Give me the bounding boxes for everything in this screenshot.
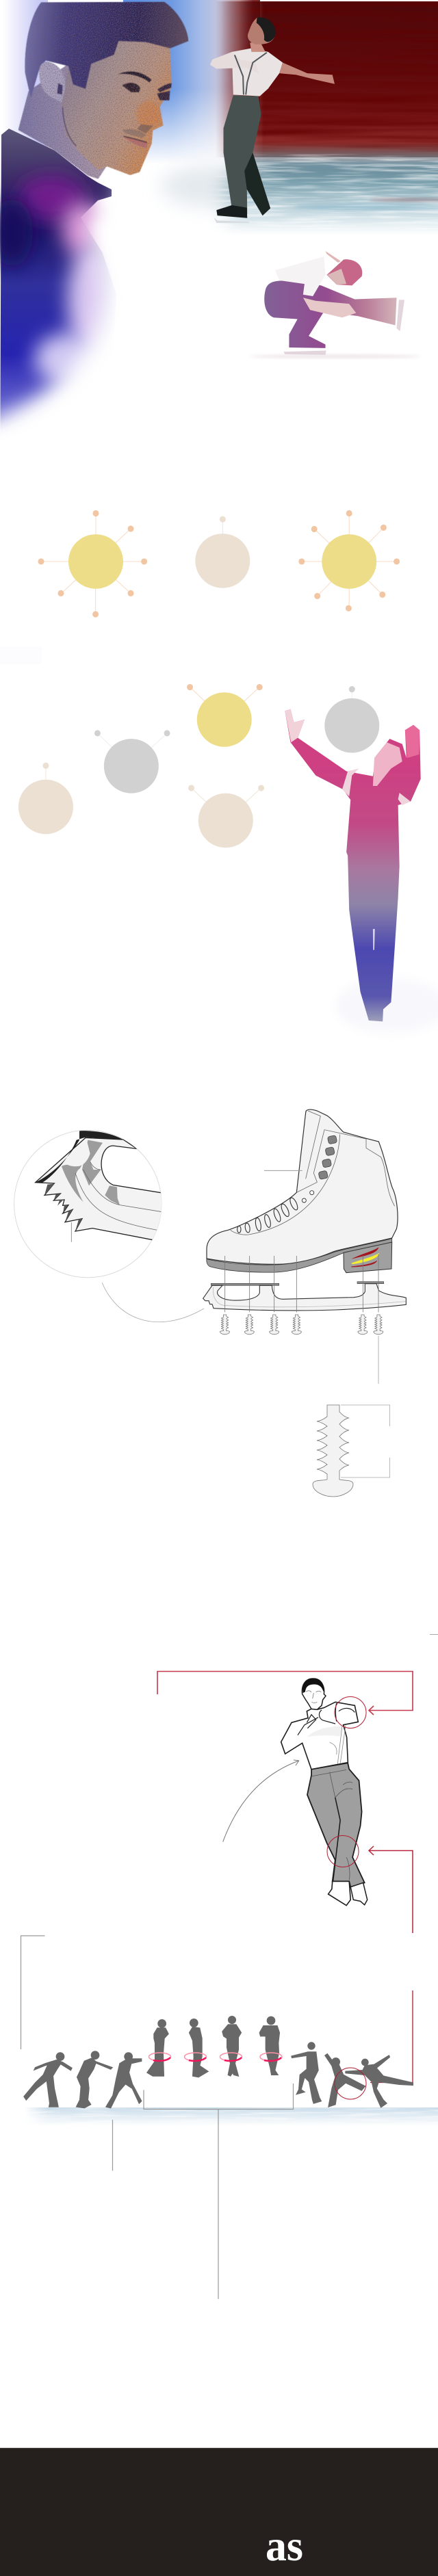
nose highlight xyxy=(136,101,160,127)
contour lines xyxy=(75,1161,162,1230)
forearm lines xyxy=(298,1703,355,1735)
sole xyxy=(207,1239,392,1272)
inner leg line xyxy=(333,1798,340,1881)
ring 3 xyxy=(220,2053,242,2061)
photo: arms-up skater xyxy=(285,709,421,1021)
other hand xyxy=(405,725,420,758)
silhouette 7 xyxy=(259,2016,279,2075)
far brow and eye xyxy=(157,83,172,101)
silhouette 3 xyxy=(106,2053,142,2108)
arrow: lens to blade tip xyxy=(102,1283,204,1322)
photo: shoulder of skater xyxy=(0,129,115,431)
small screws row xyxy=(220,1315,383,1335)
shirt xyxy=(275,257,326,296)
shirt xyxy=(232,49,283,96)
blue sky behind face xyxy=(123,0,260,178)
footer bar xyxy=(0,2448,438,2576)
panel: top circle row xyxy=(0,510,438,1034)
photo: portrait head xyxy=(18,2,188,179)
arm xyxy=(303,298,356,317)
head xyxy=(327,259,362,285)
footer top rule xyxy=(0,2447,438,2448)
illustration: skate boot xyxy=(203,1109,406,1312)
pale ice drift xyxy=(161,166,263,207)
ear xyxy=(39,62,65,103)
back skate xyxy=(350,1882,368,1905)
circle: beige pair xyxy=(188,785,264,847)
spin rings xyxy=(149,2053,282,2061)
trouser creases xyxy=(311,1770,352,1880)
face xyxy=(327,269,346,285)
lace holes xyxy=(302,1191,314,1202)
trousers xyxy=(224,95,270,215)
black top xyxy=(36,1131,123,1183)
skate boots xyxy=(216,205,247,218)
shirt shading xyxy=(307,1726,342,1737)
screw guide lines xyxy=(225,1254,378,1312)
ring 2 xyxy=(185,2053,207,2061)
jaw line xyxy=(63,107,77,146)
nose shadow xyxy=(137,124,153,133)
circle group 2: beige with one satellite xyxy=(195,516,250,588)
silhouette 2 xyxy=(77,2051,112,2108)
gray bevels xyxy=(62,1140,120,1205)
logo: as: as xyxy=(266,2521,303,2570)
red callout top xyxy=(157,1672,413,1715)
white hub xyxy=(67,1142,90,1167)
hair xyxy=(25,2,188,98)
moustache shadow xyxy=(122,129,146,138)
panel: zoom lens on blade teeth xyxy=(14,1130,166,1278)
panel: hero background xyxy=(0,0,438,239)
laces xyxy=(237,1197,299,1233)
face xyxy=(373,742,402,786)
trousers xyxy=(307,1763,365,1887)
illustration: skater torso and head xyxy=(281,1679,358,1770)
blade body xyxy=(36,1138,166,1240)
ice streaks xyxy=(215,149,438,231)
left arm xyxy=(210,52,259,73)
upper arm behind head xyxy=(326,251,341,263)
red highlight circle knee xyxy=(327,1836,359,1867)
heel xyxy=(344,1242,392,1273)
silhouettes right xyxy=(222,2016,413,2107)
hair xyxy=(257,17,276,42)
silhouette 10 xyxy=(346,2055,413,2107)
lavender haze behind head xyxy=(0,0,48,157)
circle: gray pair xyxy=(94,730,170,793)
neck xyxy=(250,41,266,52)
silhouette 1 xyxy=(24,2053,72,2107)
photo: crouching skater xyxy=(264,251,404,355)
silhouette 8 xyxy=(292,2042,321,2103)
screw brackets xyxy=(341,1405,390,1477)
facial features xyxy=(306,1691,321,1703)
blade detail xyxy=(36,1131,166,1240)
lens circle xyxy=(14,1130,162,1278)
silhouette 4 xyxy=(147,2020,168,2076)
gray leader xyxy=(112,2120,114,2171)
circle group 1: yellow with eight satellites xyxy=(38,510,147,618)
head xyxy=(248,18,275,44)
raised hand xyxy=(285,709,305,742)
circle: beige single xyxy=(18,763,73,834)
shoulder colour washes xyxy=(0,175,117,385)
ring 4 xyxy=(260,2053,282,2061)
gap between legs xyxy=(373,929,375,950)
footer xyxy=(0,2447,438,2576)
circle: gray single xyxy=(324,686,379,753)
ice haze under arms-up skater xyxy=(335,978,438,1034)
leader line to boot xyxy=(264,1170,302,1171)
silhouette 6 xyxy=(222,2016,241,2076)
connector to big screw xyxy=(378,1336,379,1384)
blades xyxy=(283,300,404,355)
tick mark xyxy=(430,1633,438,1635)
ear shadow xyxy=(57,83,63,94)
blade inner line xyxy=(213,1287,406,1307)
gray bracket xyxy=(21,1936,45,2049)
skate blade xyxy=(214,218,249,223)
spanish flag xyxy=(351,1247,379,1267)
red callout lower xyxy=(369,1846,413,1933)
leg shadow xyxy=(244,153,270,215)
red highlight circle silhouette xyxy=(335,2068,366,2099)
near eyebrow xyxy=(118,71,152,83)
silhouettes left xyxy=(24,2019,208,2108)
right arm xyxy=(279,63,335,84)
dark red arena backdrop xyxy=(218,1,438,157)
lens leader tick xyxy=(70,1222,72,1242)
front skate xyxy=(328,1881,350,1906)
upper panel lines xyxy=(231,1111,395,1235)
photo: crouching skater shadow xyxy=(250,354,421,358)
mouth xyxy=(124,136,147,148)
braces xyxy=(235,53,267,94)
head xyxy=(302,1679,326,1709)
shirt xyxy=(281,1702,358,1770)
hips and legs xyxy=(264,280,397,348)
cuffs xyxy=(342,768,411,805)
gray phase bracket xyxy=(144,2084,293,2299)
blade plates xyxy=(211,1282,384,1285)
silhouette 5 xyxy=(190,2019,208,2077)
hair xyxy=(302,1679,324,1693)
red highlight circle shoulder xyxy=(335,1696,366,1728)
jump arc arrow xyxy=(223,1760,299,1842)
near eye xyxy=(122,83,140,92)
face xyxy=(62,39,172,175)
faint haze patch xyxy=(0,646,42,663)
silhouette 9 xyxy=(325,2054,365,2107)
boot upper xyxy=(207,1109,398,1264)
big screw xyxy=(313,1405,353,1497)
blade xyxy=(203,1284,406,1311)
brace lines xyxy=(330,1726,346,1763)
circle group 3: yellow with eight satellites xyxy=(298,510,400,612)
mouth line xyxy=(124,136,147,142)
ice strip xyxy=(29,2107,438,2123)
ring 1 xyxy=(149,2053,171,2061)
circle: yellow pair xyxy=(187,684,263,747)
photo: standing skater xyxy=(210,17,335,223)
illustration: skater in rotation, legs xyxy=(307,1763,368,1906)
neck xyxy=(18,64,107,179)
red callout to silhouette xyxy=(370,1990,413,2082)
eyelets xyxy=(318,1135,337,1179)
tooth shading xyxy=(44,1184,82,1231)
